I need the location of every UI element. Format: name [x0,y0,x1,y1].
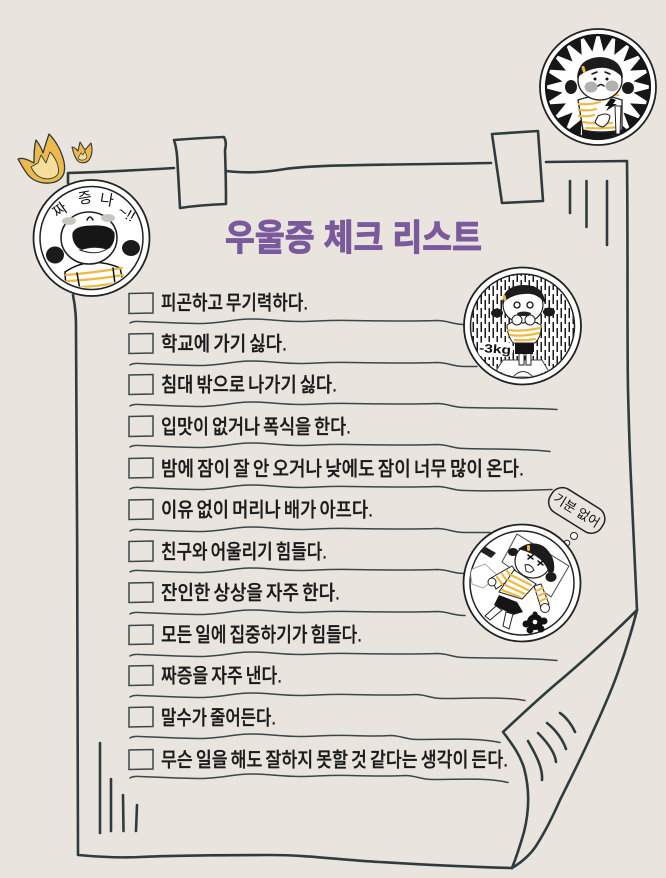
pigtails [46,246,64,264]
item 7: 친구와 어울리기 힘들다. [161,540,327,564]
item 4 [129,416,550,452]
girl [578,95,622,142]
item 4: 입맛이 없거나 폭식을 한다. [161,416,351,438]
hands [512,315,522,325]
shorts [494,595,523,615]
item 12 [129,748,508,782]
folded corner [503,610,637,868]
decorative paper lines top right [570,181,607,245]
hand [595,114,610,127]
pillow [502,534,569,597]
badge: girl holding lightning [540,29,656,145]
body [499,570,536,599]
shout text: ~!! [115,202,138,226]
item 9: 모든 일에 집중하기가 힘들다. [161,624,362,646]
shout text: 나 [98,191,115,210]
item 11: 말수가 줄어든다. [161,706,276,730]
item 3 [129,374,557,410]
item 7 [129,540,465,574]
decorative paper lines bottom left [100,743,137,833]
item 8 [129,582,465,616]
head [515,544,551,578]
item 6: 이유 없이 머리나 배가 아프다. [161,498,373,522]
weight label: -3kg [479,341,512,357]
legs [485,606,502,620]
shout text: 증 [77,189,93,208]
item 8: 잔인한 상상을 자주 한다. [161,582,340,604]
shout text: 짜 [50,199,71,221]
icon: small flame [72,142,92,163]
left arm [491,566,518,589]
item 2: 학교에 가기 싫다. [161,332,287,356]
badge: shouting girl [34,180,150,296]
icon: large flame [18,134,65,183]
item 12: 무슨 일을 해도 잘하지 못할 것 같다는 생각이 든다. [161,748,508,772]
pigtails [508,548,518,556]
body [507,320,541,343]
badge: girl lying down [464,524,580,642]
checklist [129,292,557,782]
item 5 [129,458,552,491]
right arm [534,584,549,608]
item 1 [129,292,465,324]
item 11 [129,706,500,742]
item 5: 밤에 잠이 잘 안 오거나 낮에도 잠이 너무 많이 온다. [161,458,524,480]
open mouth [73,226,114,250]
head [503,287,543,323]
item 6 [129,498,490,532]
face [61,212,117,264]
teddy bear [522,612,548,634]
item 2 [129,332,477,366]
paper sheet outline [68,161,637,868]
shirt [64,262,123,282]
slipper [481,546,496,558]
item 10: 짜증을 자주 낸다. [161,664,282,688]
item 10 [129,664,525,700]
badge: weight loss girl [464,268,581,384]
legs and shorts [515,342,533,354]
sun rays [546,35,650,139]
tape left [174,137,226,208]
thought bubble [544,483,609,546]
shout text [50,189,138,226]
item 3: 침대 밖으로 나가기 싫다. [161,374,337,396]
nose [87,217,93,220]
tape right [492,131,543,203]
lightning [605,98,617,111]
cheeks [62,217,76,225]
item 1: 피곤하고 무기력하다. [161,292,308,314]
scale [492,360,552,377]
item 9 [129,624,557,660]
title: 우울증 체크 리스트 [225,217,482,258]
thought bubble: 기분 없어 [551,490,603,530]
